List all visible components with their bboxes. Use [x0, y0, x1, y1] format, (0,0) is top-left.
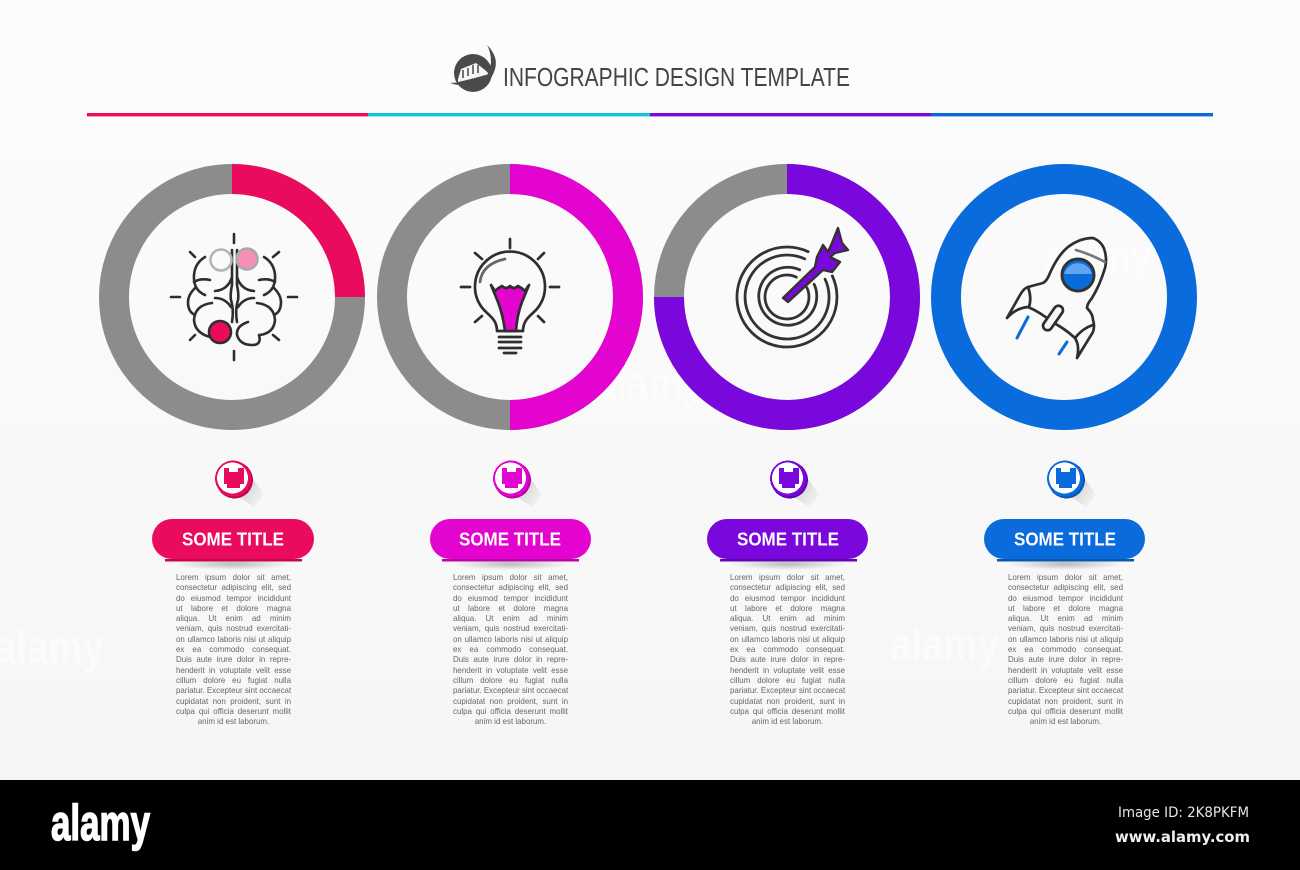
text block 1: consectetur adipiscing elit, sed	[176, 583, 291, 592]
text block 3: ex ea commodo consequat.	[730, 645, 845, 654]
top coloured rule	[87, 113, 1213, 116]
title pill 2: SOME TITLE	[459, 530, 561, 550]
text block 3: cillum dolore eu fugiat nulla	[730, 676, 845, 685]
text block 3: culpa qui officia deserunt mollit	[730, 707, 845, 716]
text block 3: aliqua. Ut enim ad minim	[730, 614, 845, 623]
icon: rocket	[1007, 238, 1106, 358]
text block 2: cillum dolore eu fugiat nulla	[453, 676, 568, 685]
text block 1: culpa qui officia deserunt mollit	[176, 707, 291, 716]
ring 2: half	[392, 179, 628, 415]
text block 1: cillum dolore eu fugiat nulla	[176, 676, 291, 685]
text block 4: veniam, quis nostrud exercitati-	[1008, 624, 1123, 633]
text block 2: veniam, quis nostrud exercitati-	[453, 624, 568, 633]
text block 3: do eiusmod tempor incididunt	[730, 594, 845, 603]
text block 3: ut labore et dolore magna	[730, 604, 845, 613]
logo icon	[450, 45, 496, 92]
text block 2: consectetur adipiscing elit, sed	[453, 583, 568, 592]
text block 1: anim id est laborum.	[198, 717, 269, 726]
text block 2: ex ea commodo consequat.	[453, 645, 568, 654]
text block 1: ut labore et dolore magna	[176, 604, 291, 613]
title pill 4: SOME TITLE	[1014, 530, 1116, 550]
footer bar: www.alamy.com	[1115, 828, 1250, 846]
text block 3: cupidatat non proident, sunt in	[730, 697, 845, 706]
text block 3: anim id est laborum.	[752, 717, 823, 726]
watermark text: alamy	[595, 357, 704, 409]
title: INFOGRAPHIC DESIGN TEMPLATE	[503, 62, 850, 92]
text block 3: consectetur adipiscing elit, sed	[730, 583, 845, 592]
watermark text: alamy	[890, 618, 999, 670]
text block 1: do eiusmod tempor incididunt	[176, 594, 291, 603]
text block 1: henderit in voluptate velit esse	[176, 666, 291, 675]
text block 1: veniam, quis nostrud exercitati-	[176, 624, 291, 633]
text block 2: Lorem ipsum dolor sit amet,	[453, 573, 568, 582]
text block 3: Lorem ipsum dolor sit amet,	[730, 573, 845, 582]
title pill 3	[707, 519, 868, 570]
text block 3	[730, 573, 846, 726]
text block 2: ut labore et dolore magna	[453, 604, 568, 613]
text block 4: on ullamco laboris nisi ut aliquip	[1008, 635, 1123, 644]
text block 3: henderit in voluptate velit esse	[730, 666, 845, 675]
footer bar: alamy	[51, 795, 150, 851]
text block 1: ex ea commodo consequat.	[176, 645, 291, 654]
ring 4: full	[946, 179, 1182, 415]
text block 4: consectetur adipiscing elit, sed	[1008, 583, 1123, 592]
text block 4: do eiusmod tempor incididunt	[1008, 594, 1123, 603]
text block 4	[1008, 573, 1124, 726]
text block 4: aliqua. Ut enim ad minim	[1008, 614, 1123, 623]
text block 1	[176, 573, 292, 726]
text block 3: pariatur. Excepteur sint occaecat	[730, 686, 845, 695]
text block 2: culpa qui officia deserunt mollit	[453, 707, 568, 716]
text block 3: on ullamco laboris nisi ut aliquip	[730, 635, 845, 644]
icon: light bulb	[461, 239, 559, 353]
text block 4: culpa qui officia deserunt mollit	[1008, 707, 1123, 716]
title pill 3: SOME TITLE	[737, 530, 839, 550]
pin icon 3	[770, 460, 819, 507]
text block 4: cupidatat non proident, sunt in	[1008, 697, 1123, 706]
text block 2: henderit in voluptate velit esse	[453, 666, 568, 675]
text block 4: anim id est laborum.	[1030, 717, 1101, 726]
pin icon 1	[215, 460, 264, 507]
footer bar	[0, 780, 1300, 870]
text block 4: ex ea commodo consequat.	[1008, 645, 1123, 654]
footer bar: Image ID: 2K8PKFM	[1118, 805, 1249, 821]
watermark text: alamy	[1043, 231, 1152, 283]
title pill 4	[984, 519, 1145, 570]
text block 2: pariatur. Excepteur sint occaecat	[453, 686, 568, 695]
title pill 2	[430, 519, 591, 570]
text block 1: aliqua. Ut enim ad minim	[176, 614, 291, 623]
text block 2: aliqua. Ut enim ad minim	[453, 614, 568, 623]
text block 2	[453, 573, 568, 726]
pin icon 2	[493, 460, 542, 507]
title pill 1: SOME TITLE	[182, 530, 284, 550]
icon: brain	[171, 234, 297, 360]
text block 2: on ullamco laboris nisi ut aliquip	[453, 635, 568, 644]
text block 4: pariatur. Excepteur sint occaecat	[1008, 686, 1123, 695]
watermark text	[0, 231, 1152, 673]
text block 4: henderit in voluptate velit esse	[1008, 666, 1123, 675]
text block 1: cupidatat non proident, sunt in	[176, 697, 291, 706]
text block 1: Lorem ipsum dolor sit amet,	[176, 573, 291, 582]
text block 4: Lorem ipsum dolor sit amet,	[1008, 573, 1123, 582]
text block 4: cillum dolore eu fugiat nulla	[1008, 676, 1123, 685]
text block 2: Duis aute irure dolor in repre-	[453, 655, 568, 664]
text block 2: do eiusmod tempor incididunt	[453, 594, 568, 603]
ring 3: three quarters	[669, 179, 905, 415]
text block 3: Duis aute irure dolor in repre-	[730, 655, 845, 664]
text block 4: Duis aute irure dolor in repre-	[1008, 655, 1123, 664]
text block 3: veniam, quis nostrud exercitati-	[730, 624, 845, 633]
ring 1: quarter	[114, 179, 350, 415]
text block 4: ut labore et dolore magna	[1008, 604, 1123, 613]
text block 1: Duis aute irure dolor in repre-	[176, 655, 291, 664]
icon: target and dart	[737, 228, 848, 347]
text block 1: on ullamco laboris nisi ut aliquip	[176, 635, 291, 644]
text block 1: pariatur. Excepteur sint occaecat	[176, 686, 291, 695]
pin icon 4	[1047, 460, 1096, 507]
title pill 1	[152, 519, 314, 570]
text block 2: anim id est laborum.	[475, 717, 546, 726]
text block 2: cupidatat non proident, sunt in	[453, 697, 568, 706]
